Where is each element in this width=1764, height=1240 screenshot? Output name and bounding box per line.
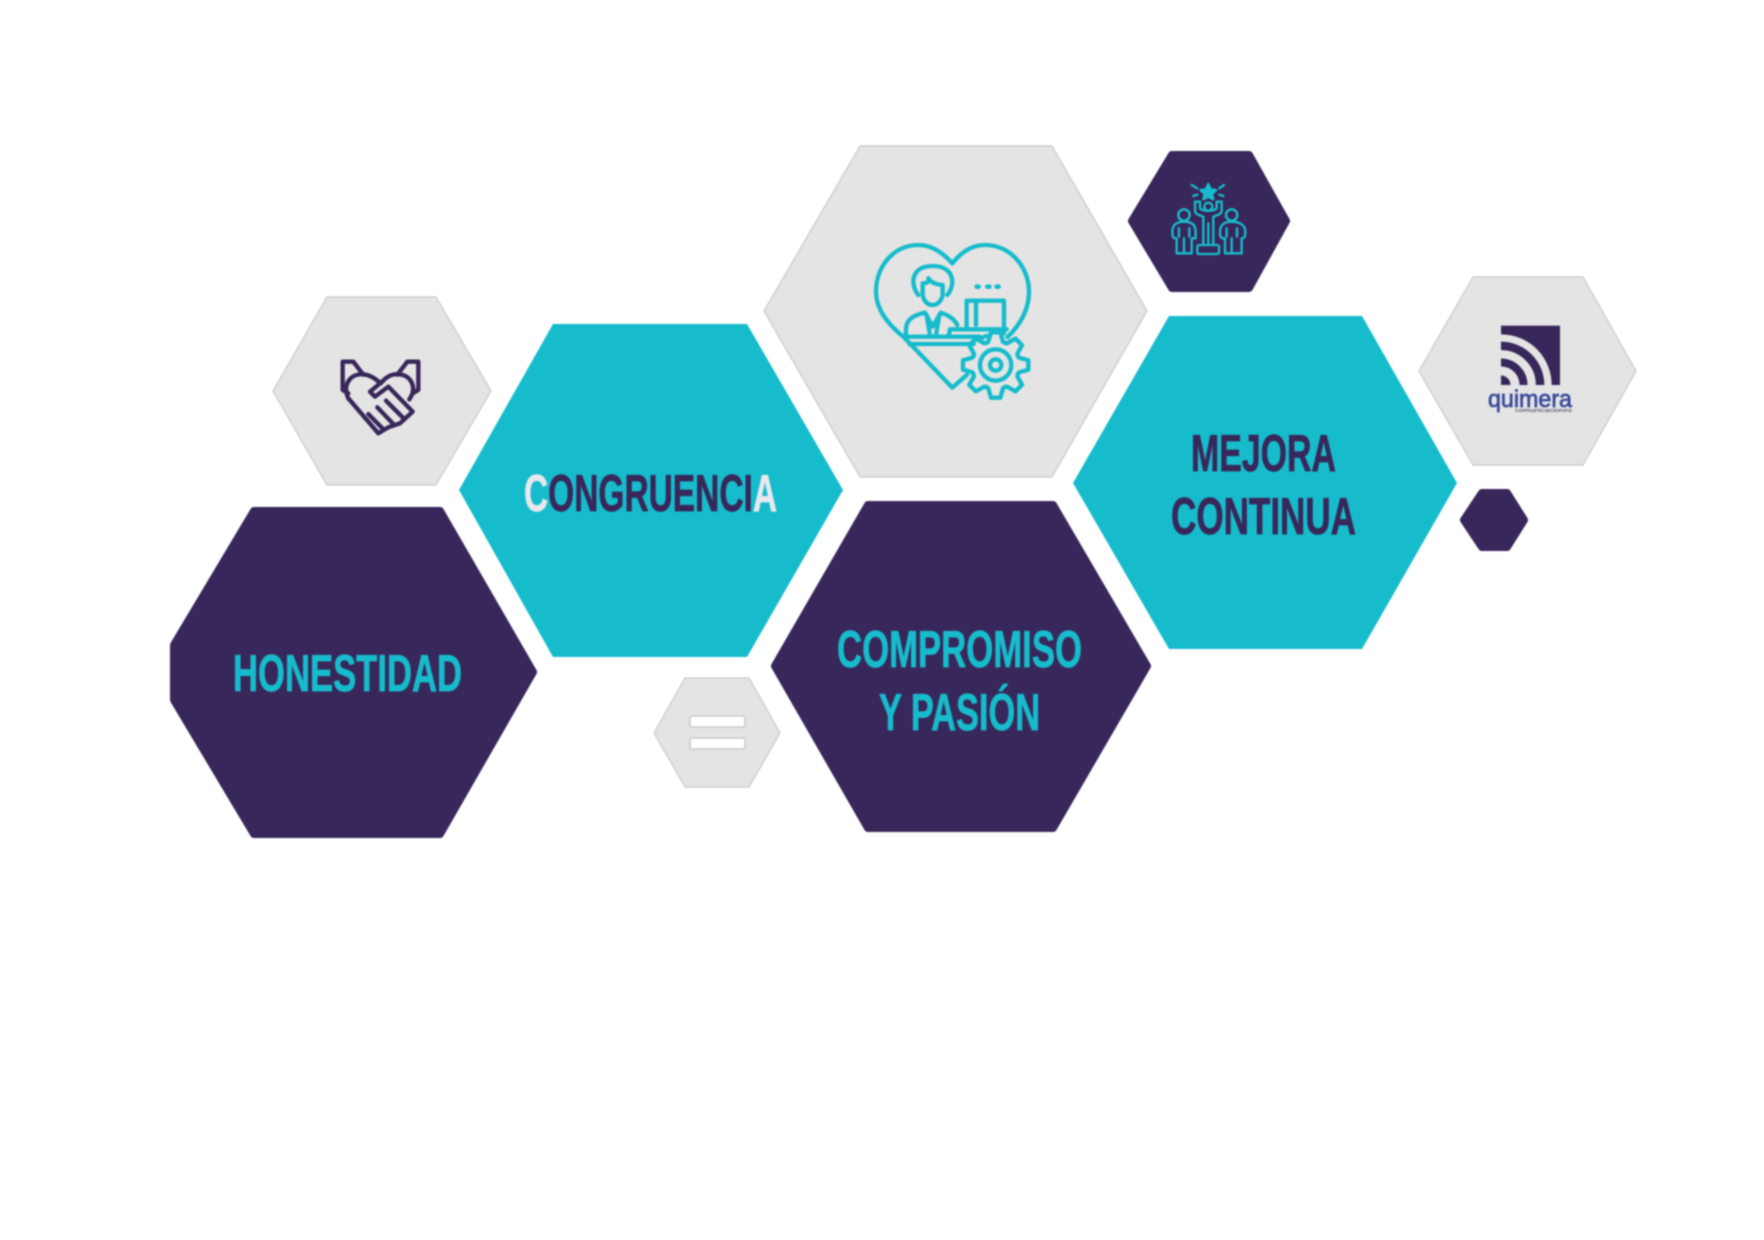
- panel: gray hexagon with logo: [1419, 277, 1636, 465]
- panel: congruencia: [459, 324, 843, 657]
- panel: mejora continua: CONTINUA: [1171, 488, 1356, 546]
- logo: quimera: comunicaciones: [1515, 408, 1573, 414]
- panel: gray hexagon with handshake icon: [273, 297, 491, 485]
- icon: handshake heart: [343, 362, 418, 433]
- panel: honestidad: HONESTIDAD: [233, 645, 462, 703]
- panel: congruencia: CONGRUENCIA: [524, 465, 777, 523]
- panel: gray hexagon with equal bars: [654, 678, 780, 787]
- panel: compromiso y pasión: Y PASIÓN: [879, 684, 1040, 742]
- icon: bars: [690, 716, 745, 749]
- panel: compromiso y pasión: [775, 505, 1147, 828]
- panel: mejora continua: [1073, 316, 1457, 649]
- icon: team with star: [1172, 184, 1245, 254]
- panel: purple hexagon with team star icon: [1132, 155, 1286, 288]
- logo: quimera: quimera: [1488, 386, 1573, 413]
- panel: gray hexagon with heart icon: [764, 146, 1147, 477]
- panel: compromiso y pasión: COMPROMISO: [837, 621, 1082, 679]
- panel: honestidad: [174, 511, 533, 834]
- panel: mejora continua: MEJORA: [1191, 425, 1336, 483]
- small purple hexagon: [1464, 493, 1524, 547]
- icon: heart with person and gear: [876, 245, 1029, 398]
- logo: quimera: [1488, 326, 1573, 414]
